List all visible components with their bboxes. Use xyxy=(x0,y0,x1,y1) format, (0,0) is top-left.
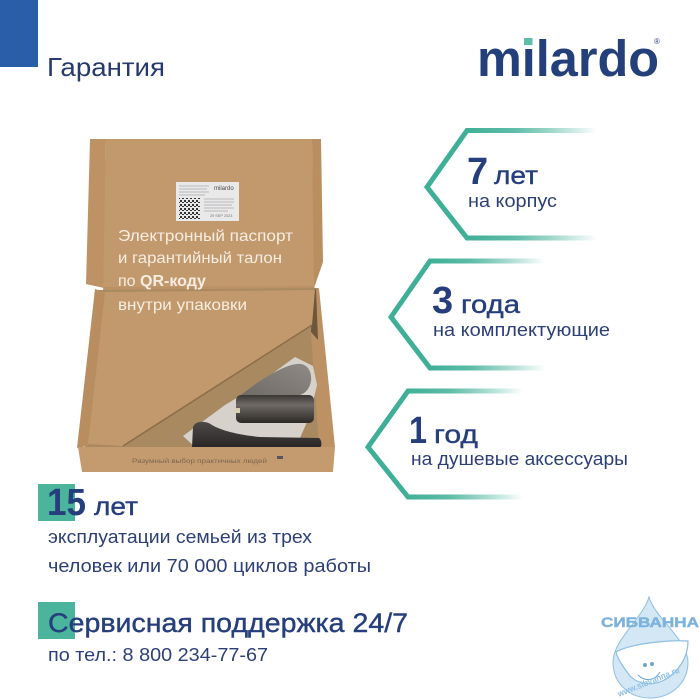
warranty card: 1 year xyxy=(368,391,628,497)
corner accent block xyxy=(0,0,38,67)
faucet plate xyxy=(241,364,311,397)
chevron outline xyxy=(427,130,597,238)
tissue paper xyxy=(183,357,317,447)
front panel small logo mark xyxy=(277,456,283,459)
box left wall xyxy=(77,289,105,448)
watermark sibvanna xyxy=(601,597,699,699)
open box photo xyxy=(77,139,335,472)
scope: body: на корпус xyxy=(468,191,557,211)
description line 2: человек или 70 000 циклов работы xyxy=(48,556,371,576)
front panel printed slogan: Разумный выбор практичных людей xyxy=(132,457,267,465)
warranty card: 3 years xyxy=(391,261,610,368)
caption line 1: Электронный паспорт xyxy=(118,228,294,245)
number 3: 3 xyxy=(432,280,453,322)
unit years: года xyxy=(461,291,520,319)
diagonal insert shadow edge xyxy=(123,325,312,446)
milardo logo xyxy=(477,30,660,87)
number 15: 15 xyxy=(47,482,86,524)
sticker fine print xyxy=(179,186,234,211)
teal square marker xyxy=(38,484,75,521)
number 7: 7 xyxy=(467,151,488,193)
warranty card: 7 years xyxy=(427,130,597,238)
logo teal dot xyxy=(524,38,532,45)
page title: Гарантия xyxy=(47,52,165,82)
service life block xyxy=(38,482,371,576)
tub face xyxy=(638,662,660,680)
watermark name: СИБВАННА xyxy=(601,614,699,630)
diagonal cardboard insert xyxy=(88,290,315,446)
faucet handle xyxy=(192,422,321,447)
box interior xyxy=(85,288,322,447)
chevron outline xyxy=(391,261,545,368)
number 1: 1 xyxy=(409,410,427,452)
box front panel xyxy=(78,447,335,472)
unit year: год xyxy=(434,421,478,449)
faucet cylinder xyxy=(235,395,314,423)
logo wordmark: milardo xyxy=(477,30,659,87)
support heading: Сервисная поддержка 24/7 xyxy=(48,608,408,638)
unit years: лет xyxy=(94,493,139,521)
phone line: по тел.: 8 800 234-77-67 xyxy=(48,645,268,665)
description line 1: эксплуатации семьей из трех xyxy=(48,527,312,547)
scope: shower accessories: на душевые аксессуары xyxy=(411,449,628,469)
service support block xyxy=(38,602,408,665)
water drop xyxy=(613,597,688,698)
inner shadow right xyxy=(311,289,318,340)
scope: components: на комплектующие xyxy=(433,320,610,340)
caption line 3: по QR-коду xyxy=(118,273,206,290)
caption line 4: внутри упаковки xyxy=(118,297,247,314)
box lid inner panel xyxy=(103,139,314,294)
sticker background xyxy=(176,182,239,221)
box right wall xyxy=(311,288,335,447)
box overlay caption xyxy=(118,228,294,314)
teal square marker xyxy=(38,602,75,639)
lid fold band xyxy=(103,286,316,295)
sticker brand: milardo xyxy=(214,186,234,192)
sticker date: 29 SEP 2023 xyxy=(210,214,232,218)
registered mark: ® xyxy=(654,37,660,46)
sticker qr code xyxy=(179,198,200,219)
chevron outline xyxy=(368,391,523,497)
box lid left flap xyxy=(86,139,106,288)
caption line 2: и гарантийный талон xyxy=(118,250,282,267)
warranty label sticker xyxy=(176,182,239,221)
bathtub xyxy=(616,641,688,684)
unit years: лет xyxy=(494,162,539,190)
box lid right flap xyxy=(312,139,323,291)
watermark url: www.sibvanna.ru xyxy=(615,665,681,699)
